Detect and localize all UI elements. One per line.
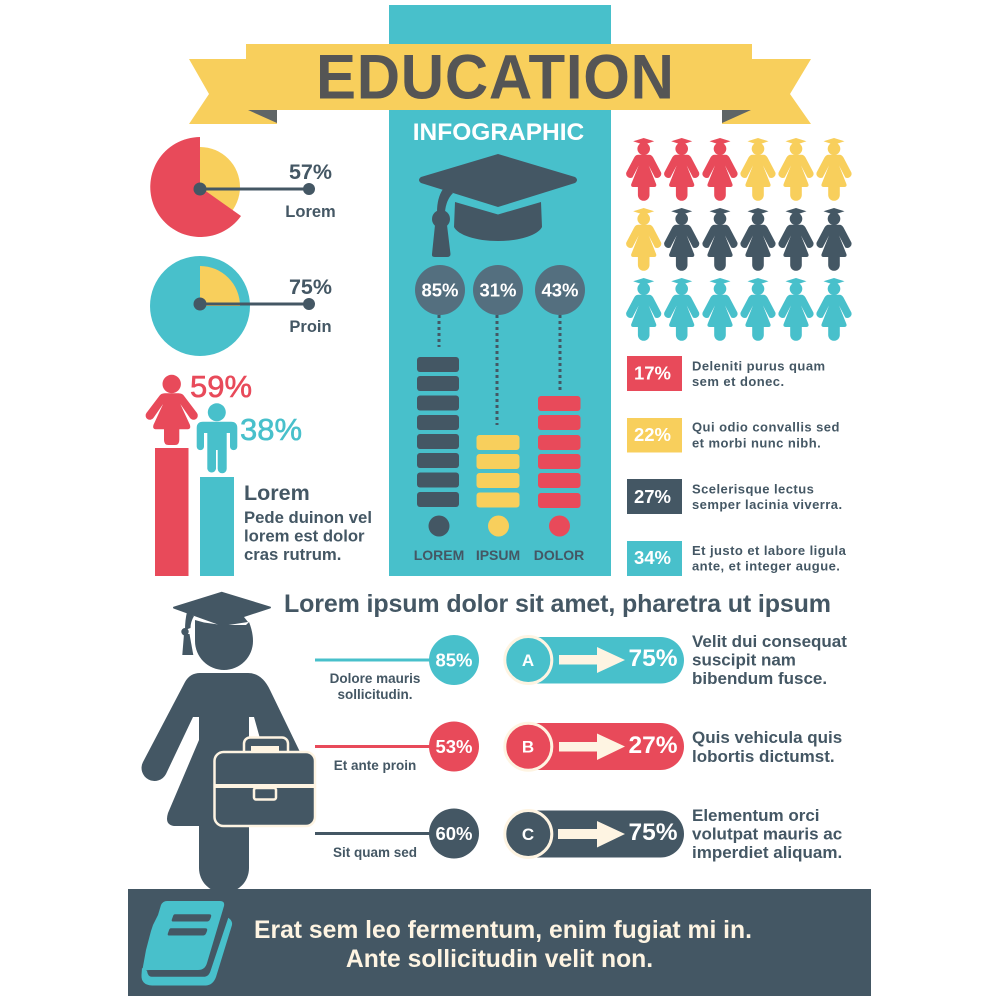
- column labels: DOLOR: [534, 547, 584, 563]
- legend item: 27%: semper lacinia viverra.: [692, 497, 843, 512]
- footer text: Erat sem leo fermentum, enim fugiat mi in.: [254, 917, 752, 944]
- label: 57% Lorem: 57%: [289, 160, 332, 184]
- stat: 60% with caption: Sit quam sed: [333, 845, 417, 860]
- pill: C 75%: [505, 810, 684, 858]
- legend item: 34%: ante, et integer augue.: [692, 559, 840, 574]
- column labels: LOREM: [414, 547, 464, 563]
- label: 75% Proin: 75%: [289, 275, 332, 299]
- stat: 53% with caption: 53%: [435, 736, 473, 757]
- stat: 85% with caption: [315, 635, 479, 702]
- footer text: Ante sollicitudin velit non.: [346, 946, 653, 973]
- icon: briefcase: [214, 738, 315, 826]
- pill: C 75%: C: [522, 825, 534, 844]
- badge: 85%: [415, 265, 465, 315]
- legend item: 27%: [627, 479, 843, 514]
- label: 57% Lorem: [285, 160, 336, 221]
- legend item: 22%: et morbi nunc nibh.: [692, 436, 821, 451]
- stacked bars: lorem: [417, 357, 459, 536]
- stat: 60% with caption: [315, 808, 479, 860]
- stacked bars: ipsum: [476, 435, 520, 536]
- heading: Lorem ipsum: Lorem ipsum dolor sit amet, pharetra ut ipsum: [284, 590, 831, 618]
- icon: graduation cap: [419, 154, 577, 257]
- pill: C 75%: 75%: [628, 819, 678, 846]
- legend item: 17%: [627, 356, 826, 391]
- pill: A 75%: A: [522, 651, 534, 670]
- badge: 31%: 31%: [479, 280, 517, 300]
- legend item: 22%: [627, 418, 840, 452]
- percent: 59%: 59%: [190, 369, 252, 404]
- stat: 85% with caption: Dolore mauris: [330, 671, 420, 686]
- footer text: [254, 917, 752, 973]
- title: EDUCATION: EDUCATION: [316, 42, 674, 113]
- panel: teal center column: [389, 5, 611, 576]
- text: C description: imperdiet aliquam.: [692, 843, 842, 862]
- bar: male with icon: [197, 403, 237, 576]
- pill: B 27%: B: [522, 738, 534, 756]
- subtitle: INFOGRAPHIC: INFOGRAPHIC: [413, 119, 585, 146]
- label: 75% Proin: [289, 275, 332, 336]
- bar: female with icon: [146, 375, 198, 576]
- pill: A 75%: 75%: [628, 645, 678, 672]
- title ribbon: [189, 44, 811, 124]
- text block: Lorem: cras rutrum.: [244, 545, 341, 564]
- text: A description: bibendum fusce.: [692, 669, 827, 688]
- pill: A 75%: [505, 636, 684, 684]
- pie chart: 57%: [150, 137, 315, 237]
- text: A description: Velit dui consequat: [692, 632, 847, 651]
- percent: 38%: 38%: [240, 412, 302, 447]
- footer band: [128, 889, 871, 996]
- legend item: 27%: 27%: [634, 486, 671, 507]
- text: B description: Quis vehicula quis: [692, 728, 842, 747]
- badge: 43%: 43%: [541, 280, 579, 300]
- text block: Lorem: lorem est dolor: [244, 526, 365, 546]
- stat: 85% with caption: sollicitudin.: [337, 687, 413, 702]
- pictogram row 2: [626, 208, 852, 271]
- stacked bars: dolor: [538, 396, 580, 536]
- text: A description: suscipit nam: [692, 650, 796, 670]
- legend item: 17%: 17%: [634, 362, 671, 384]
- column labels: IPSUM: [476, 547, 520, 563]
- label: 75% Proin: Proin: [289, 318, 332, 336]
- stat: 85% with caption: 85%: [435, 650, 473, 670]
- text: C description: [692, 806, 842, 862]
- stat: 53% with caption: Et ante proin: [334, 758, 416, 773]
- legend item: 17%: Deleniti purus quam: [692, 358, 826, 374]
- column labels: [414, 547, 584, 563]
- icon: book: [141, 901, 232, 986]
- pictogram row 3: [626, 278, 852, 341]
- label: 57% Lorem: Lorem: [285, 203, 336, 221]
- legend item: 17%: sem et donec.: [692, 374, 785, 389]
- stat: 60% with caption: 60%: [435, 823, 473, 844]
- text block: Lorem: Lorem: [244, 481, 310, 505]
- pictogram row 1: [626, 138, 852, 201]
- text block: Lorem: [244, 481, 372, 564]
- pie chart: 75%: [150, 256, 315, 356]
- legend item: 22%: 22%: [634, 424, 671, 445]
- badge: 31%: [473, 265, 523, 315]
- stat: 53% with caption: [315, 722, 479, 773]
- text: C description: volutpat mauris ac: [692, 824, 842, 844]
- legend item: 34%: 34%: [634, 547, 671, 568]
- text: B description: lobortis dictumst.: [692, 747, 835, 766]
- figure: graduate woman: [142, 592, 300, 893]
- badge: 85%: 85%: [421, 280, 459, 300]
- text: C description: Elementum orci: [692, 806, 820, 825]
- legend item: 34%: [627, 541, 847, 576]
- text: B description: [692, 728, 842, 766]
- pill: B 27%: [505, 723, 684, 770]
- text: A description: [692, 632, 847, 688]
- text block: Lorem: Pede duinon vel: [244, 508, 372, 527]
- pill: B 27%: 27%: [628, 732, 678, 759]
- legend item: 22%: Qui odio convallis sed: [692, 420, 840, 435]
- legend item: 34%: Et justo et labore ligula: [692, 543, 847, 558]
- badge: 43%: [535, 265, 585, 315]
- legend item: 27%: Scelerisque lectus: [692, 481, 814, 496]
